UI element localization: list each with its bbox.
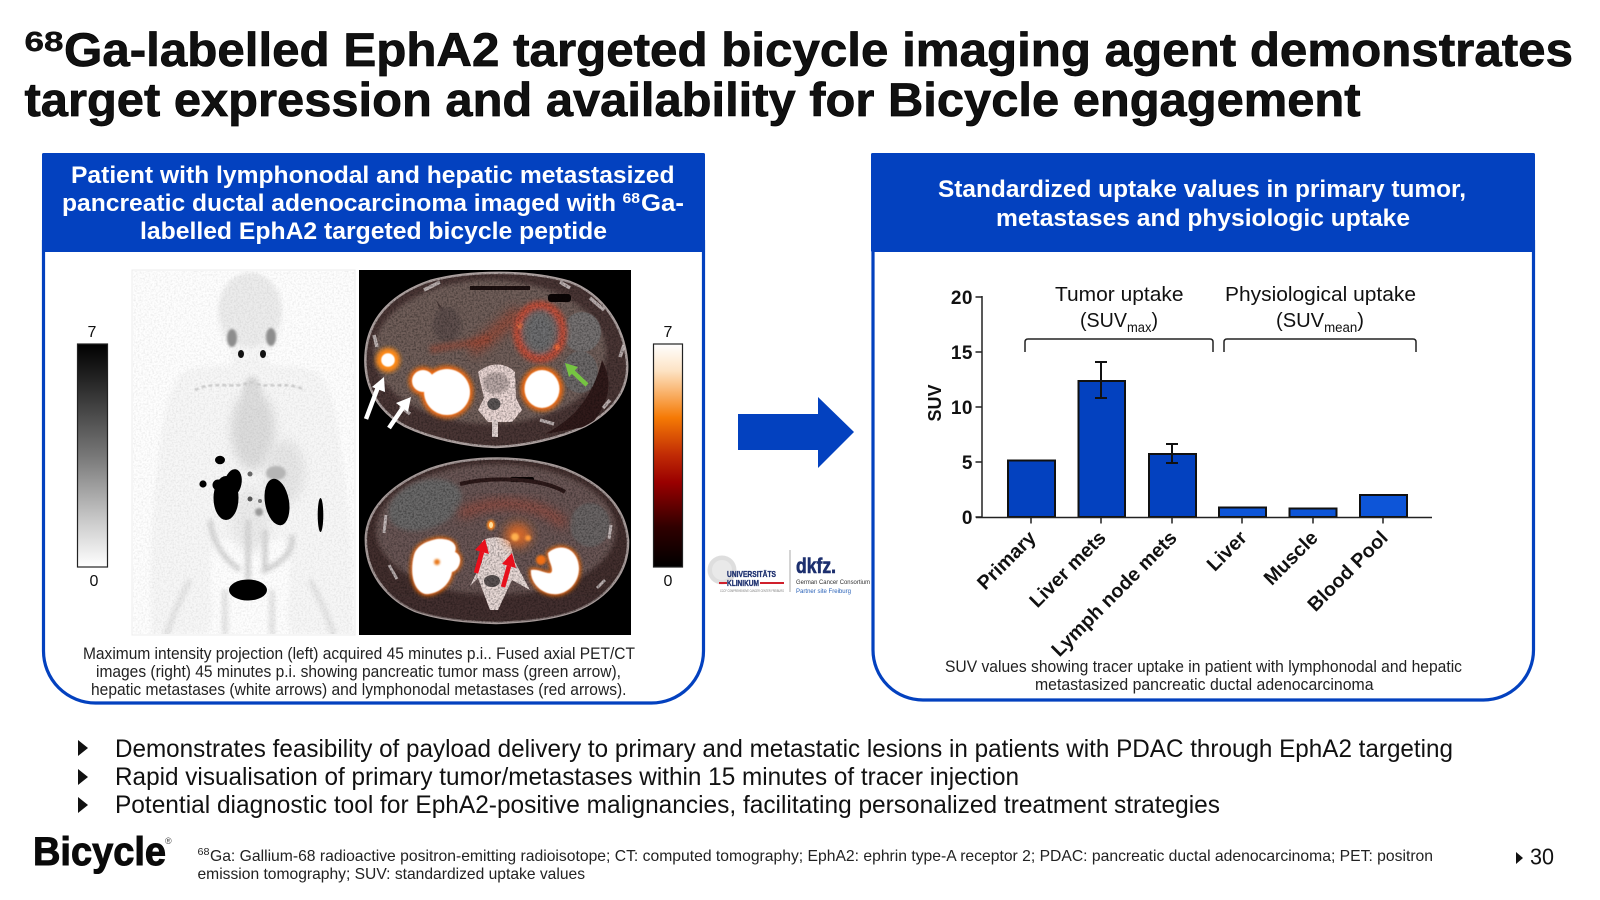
y axis: 20	[951, 288, 973, 309]
x axis: Liver mets	[1025, 527, 1111, 612]
panel: SUV chart	[871, 153, 1535, 700]
y axis: 15	[951, 343, 973, 364]
x axis: Primary	[973, 527, 1041, 594]
Bicycle logo: ®	[165, 836, 172, 846]
x axis: Lymph node mets	[1047, 527, 1182, 661]
panel header: patient imaging: pancreatic ductal adenocarcinoma imaged with	[62, 190, 616, 217]
caption: chart: metastasized pancreatic ductal adenocarcinoma	[1035, 676, 1374, 694]
bar: muscle	[1290, 508, 1336, 517]
group label: tumor uptake: Tumor uptake	[1055, 283, 1184, 306]
panel header: SUV chart: Standardized uptake values in primary tumor,	[938, 176, 1466, 203]
black lesions	[199, 456, 323, 600]
partner logos	[708, 550, 870, 595]
x axis	[973, 517, 1432, 661]
caption: imaging: images (right) 45 minutes p.i. showing pancreatic tumor mass (green arrow),	[96, 663, 621, 681]
white arrowhead	[372, 377, 385, 392]
heat colour scale	[654, 324, 682, 590]
page number: 30	[1530, 844, 1554, 870]
x axis: Muscle	[1260, 527, 1323, 590]
key points list: Demonstrates feasibility of payload delivery to primary and metastatic lesions in patients with PDAC through EphA2 targeting	[115, 735, 1453, 763]
panel header: patient imaging: 68	[622, 190, 640, 207]
caption: imaging	[83, 645, 635, 699]
partner logos: dkfz.	[796, 555, 836, 578]
panel header: patient imaging: labelled EphA2 targeted bicycle peptide	[140, 218, 607, 245]
bar: liver	[1219, 508, 1266, 517]
group label: tumor uptake: (SUV	[1080, 309, 1129, 332]
partner logos: CCCF COMPREHENSIVE CANCER CENTER FREIBURG	[720, 588, 784, 593]
white arrow	[389, 406, 404, 428]
bar: liver mets	[1078, 362, 1125, 517]
group label: tumor uptake: max	[1127, 320, 1152, 335]
red arrow	[503, 566, 509, 587]
group label: tumor uptake: )	[1151, 309, 1158, 332]
footnote: 68	[198, 846, 210, 858]
caption: chart	[945, 658, 1462, 694]
y axis: 0	[962, 508, 973, 529]
key points list	[78, 735, 1453, 819]
hot lesions	[376, 348, 563, 418]
partner logos: Partner site Freiburg	[796, 588, 851, 595]
panel header: patient imaging: Ga-	[641, 190, 684, 217]
group label: tumor uptake	[1025, 283, 1213, 352]
green arrowhead	[565, 363, 578, 377]
group label: physiological uptake: (SUV	[1276, 309, 1325, 332]
y axis	[925, 288, 982, 529]
partner logos: German Cancer Consortium	[796, 579, 870, 586]
bar: primary	[1008, 460, 1055, 517]
group label: physiological uptake: mean	[1324, 320, 1357, 335]
x axis: Blood Pool	[1304, 527, 1393, 616]
arrow: imaging to chart	[738, 397, 854, 468]
bar: lymph node mets	[1149, 444, 1196, 517]
panel header: patient imaging	[42, 153, 705, 252]
page number	[1516, 844, 1554, 870]
key points list: Potential diagnostic tool for EphA2-positive malignancies, facilitating personalized treatment strategies	[115, 791, 1220, 819]
title: target expression and availability for Bicycle engagement	[24, 73, 1361, 126]
caption: imaging: hepatic metastases (white arrows) and lymphonodal metastases (red arrows).	[91, 681, 626, 699]
heat colour scale: 0	[664, 573, 673, 590]
hot lesions	[412, 520, 579, 594]
partner logos: UNIVERSITÄTS	[727, 569, 776, 579]
group label: physiological uptake	[1224, 283, 1416, 352]
vertebra	[470, 537, 530, 610]
greyscale colour scale	[78, 324, 108, 590]
panel header: SUV chart	[871, 153, 1535, 252]
panel header: patient imaging: Patient with lymphonodal and hepatic metastasized	[71, 162, 674, 189]
green arrow	[571, 370, 587, 385]
greyscale colour scale: 7	[88, 324, 97, 341]
x axis: Liver	[1203, 527, 1252, 576]
title	[24, 23, 1573, 126]
title: Ga-labelled EphA2 targeted bicycle imaging agent demonstrates	[64, 23, 1573, 76]
bar: blood pool	[1360, 495, 1407, 517]
maximum intensity projection image	[132, 270, 355, 640]
Bicycle logo: Bicycle	[33, 830, 166, 874]
footnote: Ga: Gallium-68 radioactive positron-emitting radioisotope; CT: computed tomography; EphA2: ephrin type-A receptor 2; PDAC: pancreatic ductal adenocarcinoma; PET: positron	[210, 848, 1433, 865]
greyscale colour scale: 0	[90, 573, 99, 590]
heat colour scale: 7	[664, 324, 673, 341]
caption: imaging: Maximum intensity projection (left) acquired 45 minutes p.i.. Fused axial PET/CT	[83, 645, 635, 663]
y axis: 10	[951, 398, 973, 419]
key points list: Rapid visualisation of primary tumor/metastases within 15 minutes of tracer injection	[115, 763, 1019, 791]
group label: physiological uptake: )	[1357, 309, 1364, 332]
panel header: SUV chart: metastases and physiologic uptake	[996, 205, 1410, 232]
bar chart	[925, 283, 1432, 661]
panel: patient imaging	[42, 153, 705, 703]
red arrowhead	[475, 539, 489, 554]
red arrowhead	[502, 553, 516, 568]
axial PET/CT image: lower slice	[359, 450, 631, 635]
footnote: emission tomography; SUV: standardized uptake values	[198, 866, 585, 883]
partner logos: KLINIKUM	[727, 578, 759, 588]
vertebra	[478, 364, 522, 422]
white arrow	[366, 387, 378, 419]
red arrow	[476, 552, 482, 573]
caption: chart: SUV values showing tracer uptake in patient with lymphonodal and hepatic	[945, 658, 1462, 676]
axial PET/CT image: upper slice	[359, 270, 631, 450]
y axis: 5	[962, 453, 973, 474]
group label: physiological uptake: Physiological uptake	[1225, 283, 1416, 306]
y axis: SUV	[925, 384, 945, 422]
footnote	[198, 846, 1433, 883]
white arrowhead	[396, 397, 411, 412]
title: 68	[24, 26, 64, 57]
